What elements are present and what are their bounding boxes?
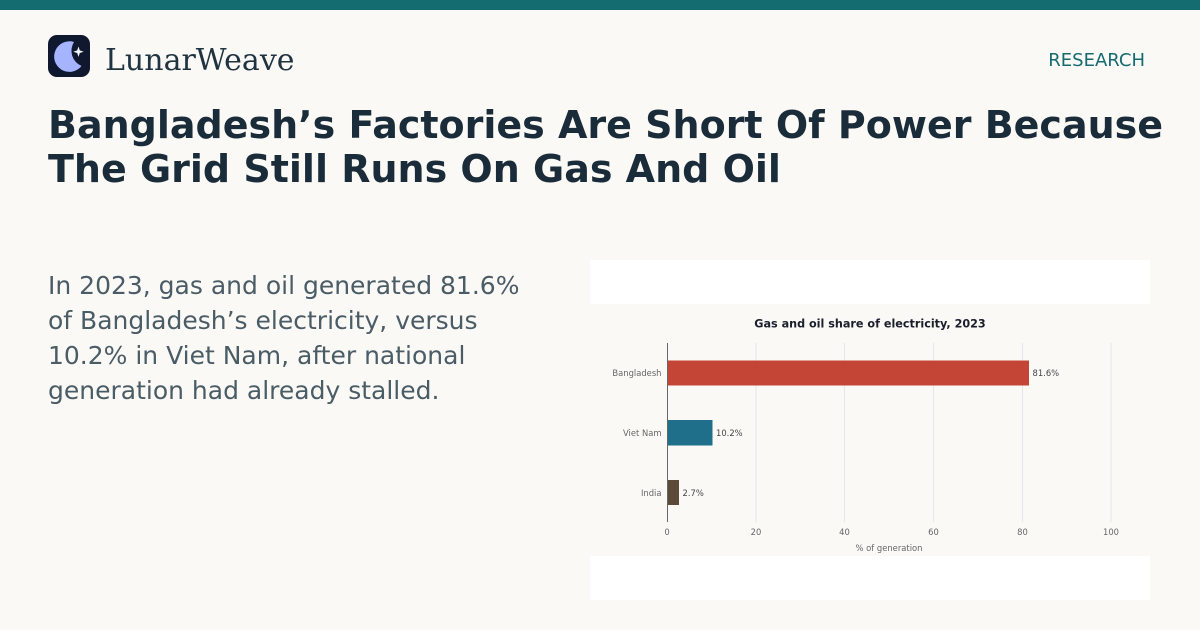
- bar chart: 2.7%: [682, 488, 704, 498]
- title: The Grid Still Runs On Gas And Oil: [48, 147, 781, 191]
- brand name: LunarWeave: [105, 43, 295, 78]
- bar chart: 81.6%: [1032, 368, 1059, 378]
- bar chart: 100: [1103, 527, 1119, 537]
- bar chart: 40: [839, 527, 850, 537]
- top accent bar: [0, 0, 1200, 10]
- bar chart: 20: [751, 527, 761, 537]
- summary text: 10.2% in Viet Nam, after national: [48, 341, 465, 370]
- category label: RESEARCH: [1048, 50, 1145, 71]
- summary text: [48, 271, 519, 405]
- bar chart: 80: [1017, 527, 1028, 537]
- icon: crescent moon logo: [48, 35, 90, 77]
- title: [48, 103, 1163, 191]
- bar chart: Viet Nam: [623, 428, 662, 438]
- panel: chart card: [590, 260, 1150, 600]
- bar chart: Gas and oil share of electricity, 2023: [754, 318, 986, 330]
- bar chart: [590, 304, 1150, 556]
- bar chart: 10.2%: [716, 428, 743, 438]
- bar chart: India: [641, 488, 662, 498]
- summary text: generation had already stalled.: [48, 376, 439, 405]
- bar chart: % of generation: [856, 543, 922, 553]
- title: Bangladesh’s Factories Are Short Of Power Because: [48, 103, 1163, 147]
- summary text: In 2023, gas and oil generated 81.6%: [48, 271, 519, 300]
- bar chart: 0: [664, 527, 670, 537]
- bar chart: Bangladesh: [612, 368, 662, 378]
- summary text: of Bangladesh’s electricity, versus: [48, 306, 478, 335]
- bar chart: 60: [928, 527, 939, 537]
